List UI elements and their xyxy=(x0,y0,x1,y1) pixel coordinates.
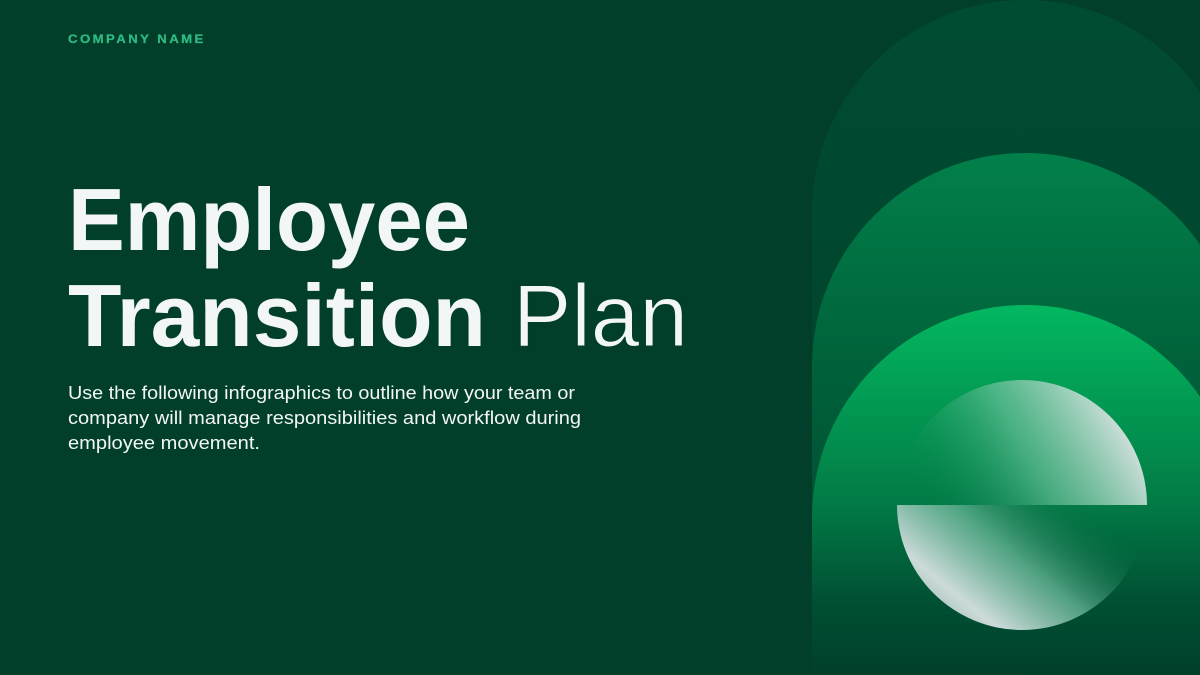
upper semicircle xyxy=(897,380,1147,505)
icon: split circle xyxy=(897,380,1147,630)
company name: COMPANY NAME xyxy=(68,33,206,46)
lower semicircle xyxy=(897,505,1147,630)
description: employee movement. xyxy=(68,433,260,453)
arch: back dark green xyxy=(812,0,1200,675)
arch: front bright green xyxy=(812,305,1200,675)
arch: middle green xyxy=(812,153,1200,675)
title: Transition xyxy=(68,266,486,365)
description xyxy=(68,383,581,453)
title: Employee xyxy=(68,170,470,269)
title xyxy=(68,170,688,365)
title: Plan xyxy=(513,266,688,365)
description: Use the following infographics to outline how your team or xyxy=(68,383,575,403)
description: company will manage responsibilities and workflow during xyxy=(68,408,581,428)
